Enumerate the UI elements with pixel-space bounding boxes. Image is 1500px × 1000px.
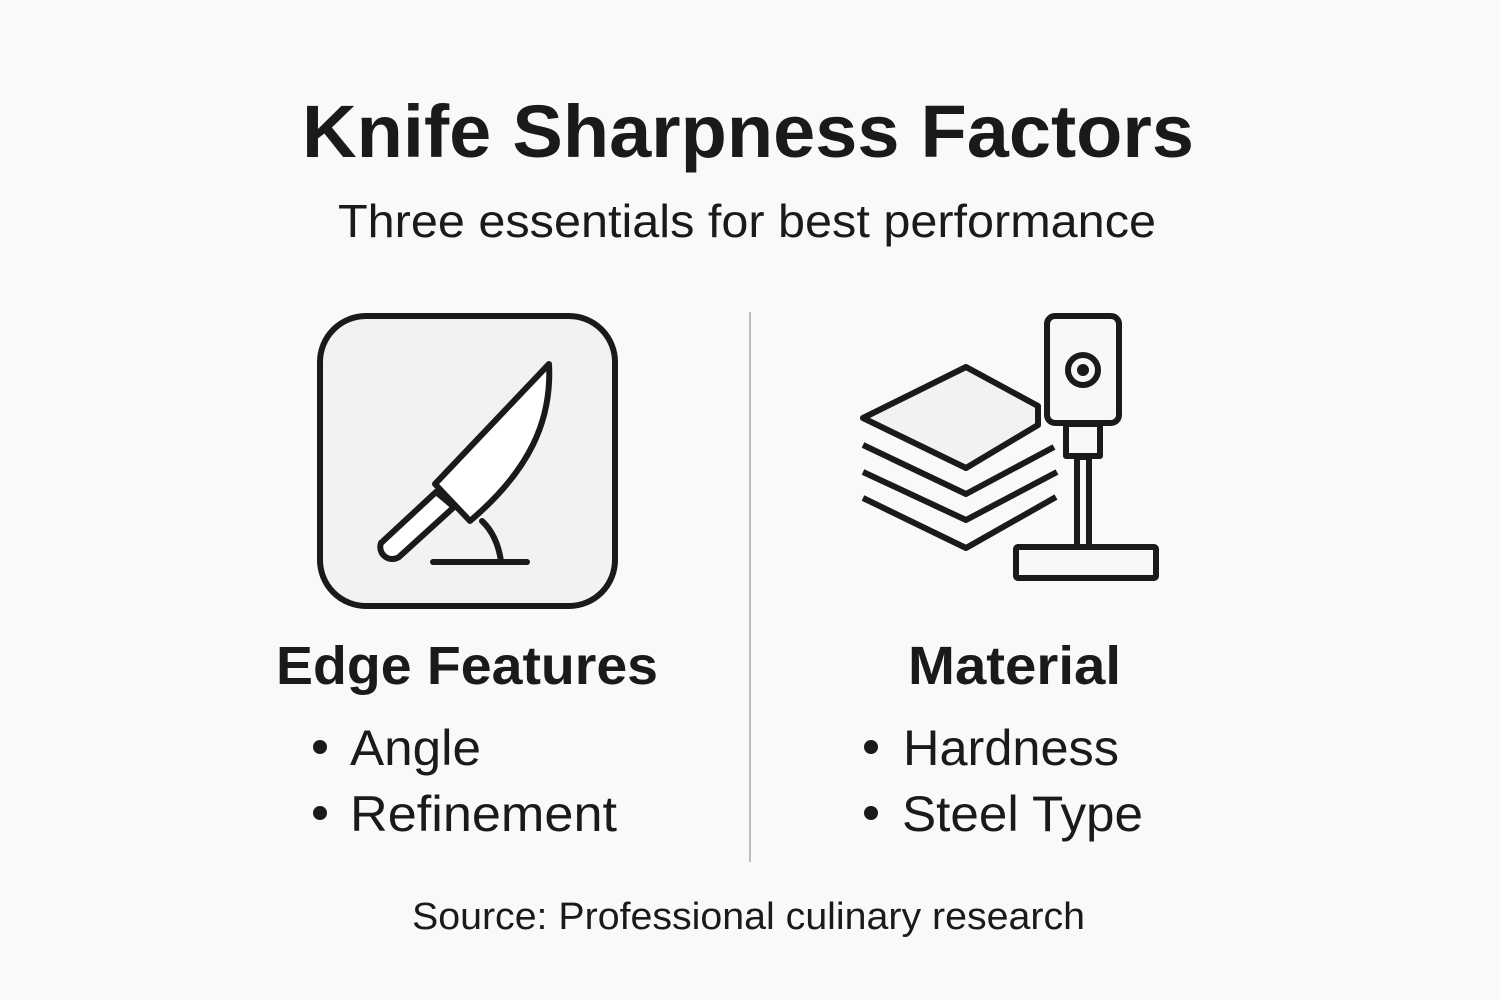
list: material items: Hardness (903, 720, 1119, 776)
heading: Edge Features: Edge Features (276, 636, 658, 696)
list: edge items: Angle (350, 720, 481, 776)
icon: knife on angle (320, 316, 615, 606)
list: material items: Steel Type (902, 786, 1143, 842)
subtitle: Three essentials for best performance (338, 195, 1156, 247)
list: edge items (313, 720, 617, 842)
list: material items (864, 720, 1143, 842)
source note: Source: Professional culinary research (412, 896, 1085, 938)
panel: edge features (276, 316, 658, 842)
panel: material (863, 316, 1156, 842)
heading: Material: Material (908, 636, 1121, 696)
list: edge items: Refinement (350, 786, 617, 842)
title: Knife Sharpness Factors (302, 90, 1194, 173)
icon: layers and hardness tester (863, 316, 1156, 578)
